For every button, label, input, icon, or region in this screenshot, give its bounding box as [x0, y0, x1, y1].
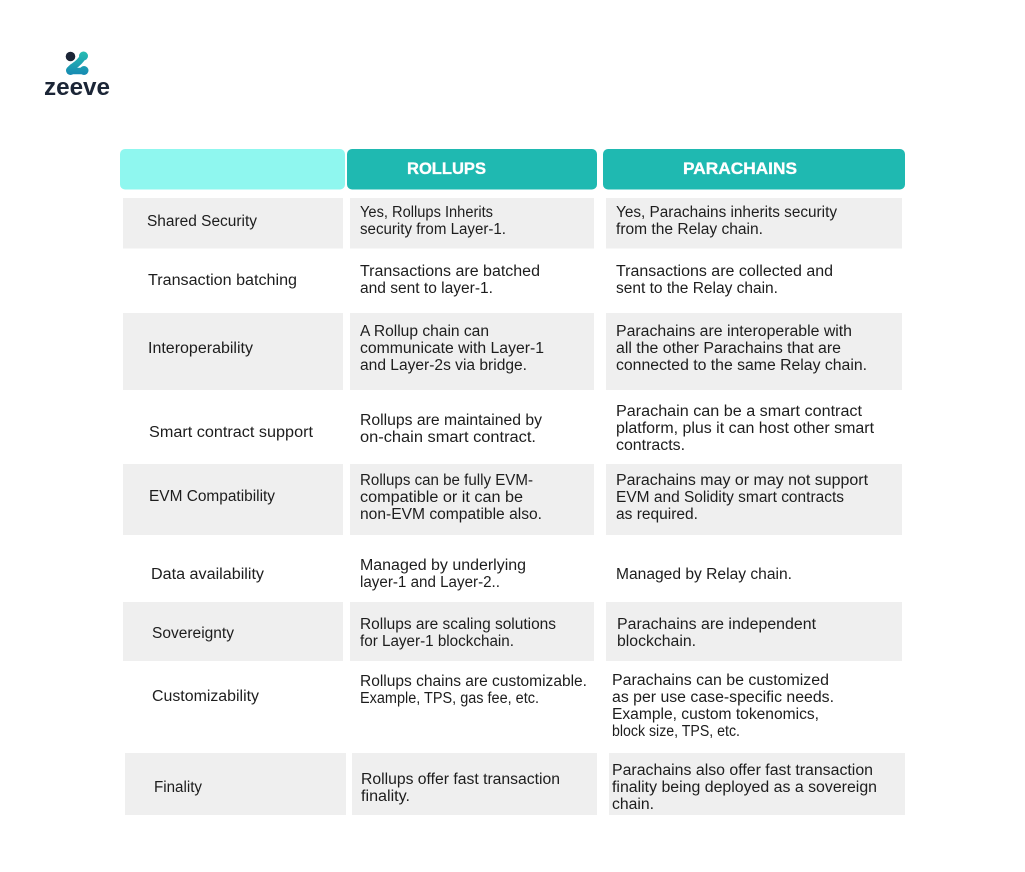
row: shared security: from the Relay chain.: [616, 221, 763, 238]
row: transaction batching: and sent to layer-1.: [360, 280, 493, 297]
row: customizability: [152, 672, 834, 740]
row: finality: finality.: [361, 788, 410, 805]
row: smart contract support: platform, plus it can host other smart: [616, 420, 875, 437]
row: shared security: Yes, Parachains inherits security: [616, 204, 837, 221]
row: interoperability: Interoperability: [148, 340, 253, 357]
row: evm compatibility: EVM and Solidity smart contracts: [616, 489, 844, 506]
row: customizability: Example, custom tokenomics,: [612, 706, 819, 723]
row: transaction batching: Transactions are collected and: [616, 263, 833, 280]
row: evm compatibility: as required.: [616, 506, 698, 523]
row: interoperability: connected to the same Relay chain.: [616, 357, 867, 374]
row: customizability: as per use case-specific needs.: [612, 689, 834, 706]
row: shared security: Yes, Rollups Inherits: [360, 204, 493, 221]
row: smart contract support: on-chain smart contract.: [360, 429, 536, 446]
row: finality: Parachains also offer fast transaction: [612, 762, 873, 779]
row: shared security: [123, 198, 902, 248]
row: customizability: Rollups chains are customizable.: [360, 673, 587, 690]
row: transaction batching: [148, 263, 833, 297]
row: smart contract support: Parachain can be a smart contract: [616, 403, 863, 420]
row: smart contract support: Smart contract support: [149, 424, 314, 441]
row: data availability: Managed by Relay chain.: [616, 566, 792, 583]
row: shared security: security from Layer-1.: [360, 221, 506, 238]
logo: zeeve: [44, 52, 110, 101]
row: evm compatibility: compatible or it can be: [360, 489, 523, 506]
row: data availability: layer-1 and Layer-2..: [360, 574, 500, 591]
row: data availability: Data availability: [151, 566, 264, 583]
heading: rollups: ROLLUPS: [407, 159, 486, 178]
row: evm compatibility: [123, 464, 902, 535]
row: interoperability: all the other Parachains that are: [616, 340, 841, 357]
row: sovereignty: Sovereignty: [152, 625, 234, 642]
row: interoperability: communicate with Layer-1: [360, 340, 544, 357]
row: shared security: Shared Security: [147, 213, 257, 230]
row: customizability: Customizability: [152, 688, 259, 705]
row: evm compatibility: EVM Compatibility: [149, 488, 275, 505]
row: finality: Rollups offer fast transaction: [361, 771, 560, 788]
row: customizability: Parachains can be customized: [612, 672, 829, 689]
row: customizability: block size, TPS, etc.: [612, 723, 740, 740]
row: sovereignty: Rollups are scaling solutions: [360, 616, 556, 633]
heading: parachains: PARACHAINS: [683, 159, 797, 178]
row: sovereignty: Parachains are independent: [617, 616, 817, 633]
row: transaction batching: sent to the Relay chain.: [616, 280, 778, 297]
row: sovereignty: [123, 602, 902, 661]
row: smart contract support: contracts.: [616, 437, 685, 454]
row: evm compatibility: non-EVM compatible also.: [360, 506, 542, 523]
row: customizability: Example, TPS, gas fee, etc.: [360, 690, 539, 707]
row: sovereignty: for Layer-1 blockchain.: [360, 633, 514, 650]
row: interoperability: Parachains are interoperable with: [616, 323, 852, 340]
row: sovereignty: blockchain.: [617, 633, 696, 650]
row: smart contract support: [149, 403, 875, 454]
row: evm compatibility: Rollups can be fully EVM-: [360, 472, 533, 489]
row: interoperability: and Layer-2s via bridge.: [360, 357, 527, 374]
row: interoperability: A Rollup chain can: [360, 323, 489, 340]
logo wordmark: zeeve: [44, 74, 110, 101]
table header: [120, 149, 905, 190]
row: transaction batching: Transactions are batched: [360, 263, 540, 280]
row: data availability: Managed by underlying: [360, 557, 526, 574]
row: finality: Finality: [154, 779, 202, 796]
row: finality: [125, 753, 905, 815]
row: finality: finality being deployed as a sovereign: [612, 779, 877, 796]
icon: zeeve mark: [66, 52, 88, 75]
row: interoperability: [123, 313, 902, 390]
row: evm compatibility: Parachains may or may not support: [616, 472, 869, 489]
row: data availability: [151, 557, 792, 591]
row: transaction batching: Transaction batching: [148, 272, 297, 289]
row: finality: chain.: [612, 796, 654, 813]
row: smart contract support: Rollups are maintained by: [360, 412, 542, 429]
